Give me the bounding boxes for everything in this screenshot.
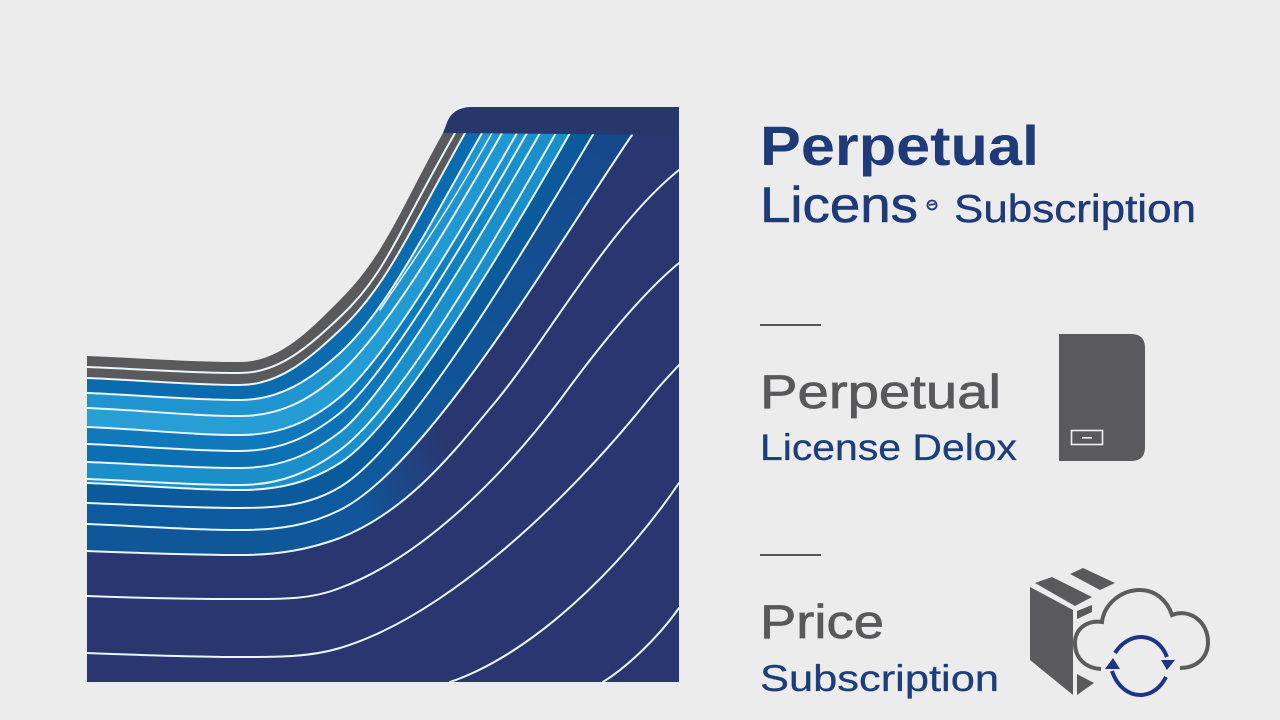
- chart: layered curved bands: [87, 107, 679, 682]
- top cap of chart: [443, 107, 679, 135]
- section: price subscription: [760, 554, 999, 699]
- band fills: [87, 133, 679, 682]
- icon: software box: [1059, 334, 1145, 461]
- divider: [760, 554, 821, 556]
- small separator glyph: [928, 200, 936, 210]
- sublabel: License Delox: [760, 427, 1018, 468]
- heading: Perpetual License Subscription: [760, 114, 1196, 233]
- heading line 1: Perpetual: [760, 114, 1039, 177]
- heading line 2 right: Subscription: [954, 188, 1196, 231]
- heading line 2 left: Licens: [760, 177, 918, 233]
- sync arrows: [1105, 637, 1175, 695]
- white contour lines: [87, 133, 679, 682]
- label: Price: [760, 595, 884, 648]
- icon: box and cloud sync: [1030, 568, 1208, 695]
- section: perpetual license box: [760, 324, 1018, 468]
- label: Perpetual: [760, 365, 1001, 418]
- cloud: [1075, 590, 1208, 669]
- divider: [760, 324, 821, 326]
- box: [1030, 568, 1115, 695]
- sublabel: Subscription: [760, 658, 999, 699]
